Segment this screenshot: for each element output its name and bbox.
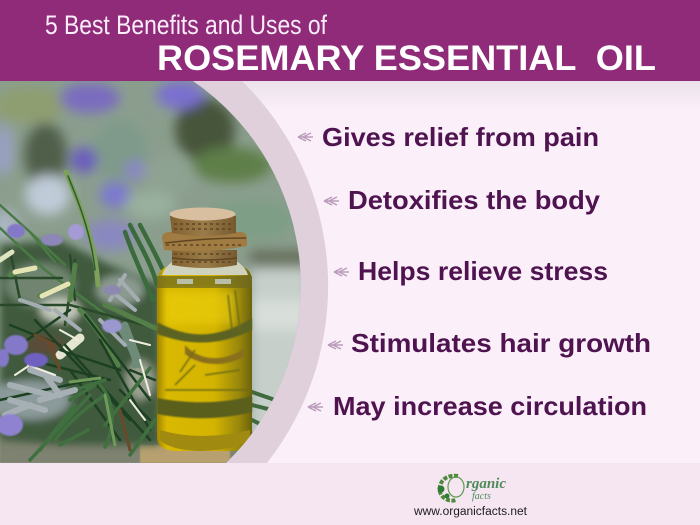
arc border around photo (193, 81, 328, 463)
oil bottle (157, 208, 252, 451)
logo wordmark: rganic (466, 476, 506, 492)
footer band (0, 463, 700, 525)
dense foliage base (0, 240, 160, 445)
icon: rosemary sprig arrow (298, 133, 313, 141)
logo: Organic Facts: facts (472, 491, 491, 502)
lavender flowers (0, 224, 122, 436)
benefit 5 (308, 391, 647, 421)
blurred background foliage (0, 81, 310, 458)
cork stopper (172, 250, 237, 268)
benefit text: Gives relief from pain (322, 122, 599, 152)
benefit text: May increase circulation (333, 391, 647, 421)
rosemary sprigs (0, 172, 275, 460)
icon: rosemary sprig arrow (334, 268, 349, 276)
table surface (0, 432, 260, 463)
photo: rosemary and oil bottle (0, 81, 310, 463)
benefit 1 (298, 122, 599, 152)
icon: leaf ring (438, 476, 464, 501)
bottle glass and oil (157, 267, 252, 451)
benefit 4 (328, 328, 651, 358)
header banner (0, 0, 700, 81)
icon: rosemary sprig arrow (324, 197, 339, 205)
benefit text: Stimulates hair growth (351, 328, 651, 358)
benefit text: Detoxifies the body (348, 185, 601, 215)
heading: main title: ROSEMARY ESSENTIAL OIL (157, 39, 656, 78)
benefit 3 (334, 256, 608, 286)
icon: rosemary sprig arrow (308, 403, 323, 411)
benefit text: Helps relieve stress (358, 256, 608, 286)
bottle shoulder highlight (162, 262, 248, 275)
logo: Organic Facts (413, 476, 528, 518)
heading: subtitle: 5 Best Benefits and Uses of (45, 10, 327, 40)
icon: rosemary sprig arrow (328, 341, 343, 349)
website address: www.organicfacts.net (413, 506, 528, 518)
benefit 2 (324, 185, 601, 215)
